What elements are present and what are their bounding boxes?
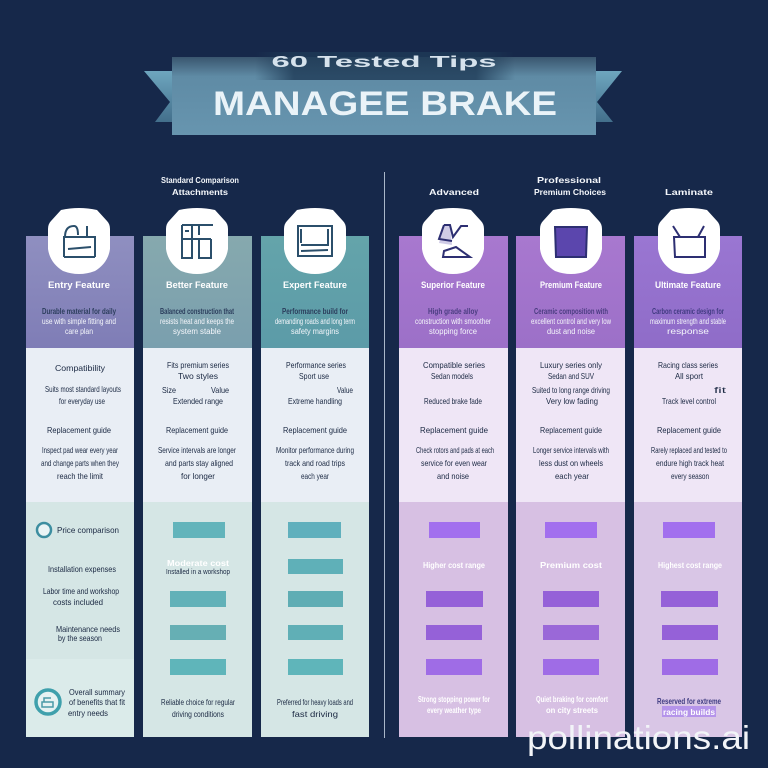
body text: Racing class series bbox=[658, 360, 718, 370]
body text: each year bbox=[301, 471, 329, 481]
body text: Track level control bbox=[662, 396, 716, 406]
header text: stopping force bbox=[429, 327, 478, 336]
body text: Replacement guide bbox=[540, 425, 602, 435]
body text: Replacement guide bbox=[420, 425, 488, 435]
body block bbox=[261, 348, 369, 503]
footer row text: by the season bbox=[58, 633, 102, 643]
body text bbox=[651, 360, 727, 481]
body text: Suited to long range driving bbox=[532, 385, 610, 395]
body text: Replacement guide bbox=[657, 425, 721, 435]
body text bbox=[41, 363, 121, 481]
column label: left group bbox=[161, 175, 239, 197]
body text: less dust on wheels bbox=[539, 458, 603, 468]
body text: Inspect pad wear every year bbox=[42, 445, 118, 455]
header text: Premium Feature bbox=[540, 280, 602, 290]
body text: and change parts when they bbox=[41, 458, 120, 468]
header text: Superior Feature bbox=[421, 280, 485, 290]
body text: endure high track heat bbox=[656, 458, 725, 468]
header block bbox=[516, 236, 625, 348]
body text: Check rotors and pads at each bbox=[416, 445, 494, 455]
header text: Expert Feature bbox=[283, 280, 347, 290]
icon: tool case bbox=[48, 208, 110, 274]
footer note: entry needs bbox=[68, 708, 108, 718]
subtitle: 60 Tested Tips bbox=[272, 54, 497, 71]
header text: excellent control and very low bbox=[531, 317, 611, 326]
divider bbox=[384, 172, 385, 738]
column label: fourth: Advanced bbox=[429, 187, 479, 197]
footer row text: Maintenance needs bbox=[56, 624, 120, 634]
footer row text: Price comparison bbox=[57, 525, 119, 535]
watermark: pollinations.ai bbox=[527, 719, 750, 756]
panel: column 3 bbox=[261, 208, 369, 737]
footer highlight text: Installed in a workshop bbox=[166, 569, 230, 576]
header text: safety margins bbox=[291, 327, 339, 336]
footer note bbox=[657, 697, 721, 717]
footer highlight text: Moderate cost bbox=[167, 558, 229, 568]
body text: Replacement guide bbox=[47, 425, 111, 435]
comparison bar bbox=[661, 591, 718, 607]
header text: Entry Feature bbox=[48, 280, 110, 290]
comparison bar bbox=[543, 659, 599, 675]
body text: Rarely replaced and tested to bbox=[651, 445, 727, 455]
icon: winged tool bbox=[422, 208, 484, 274]
header text: use with simple fitting and bbox=[42, 317, 116, 326]
header text: Balanced construction that bbox=[160, 307, 234, 316]
footer note bbox=[277, 697, 353, 719]
panel: column 1 bbox=[26, 208, 134, 737]
icon: square frame bbox=[284, 208, 346, 274]
comparison bar bbox=[170, 625, 226, 640]
body text: Monitor performance during bbox=[276, 445, 354, 455]
header block bbox=[261, 236, 369, 348]
footer note: Overall summary bbox=[69, 687, 126, 697]
panel: column 6 bbox=[634, 208, 742, 737]
comparison bar bbox=[429, 522, 480, 538]
column label: left group: Standard Comparison bbox=[161, 175, 239, 185]
header block bbox=[399, 236, 508, 348]
ribbon left tail bbox=[144, 71, 172, 122]
body text bbox=[158, 360, 236, 481]
comparison bar bbox=[545, 522, 597, 538]
body text bbox=[416, 360, 494, 481]
footer row text: Installation expenses bbox=[48, 564, 116, 574]
body text: Size bbox=[162, 385, 176, 395]
subtitle backing bbox=[255, 52, 515, 80]
comparison bar bbox=[662, 625, 718, 640]
header text: system stable bbox=[173, 327, 222, 336]
panel: column 5 bbox=[516, 208, 625, 737]
footer note: Reliable choice for regular bbox=[161, 697, 235, 707]
header text bbox=[650, 280, 726, 336]
body text: Luxury series only bbox=[540, 360, 603, 370]
column label: fifth: Professional bbox=[537, 175, 601, 185]
comparison bar bbox=[170, 659, 226, 675]
footer highlight text: Highest cost range bbox=[658, 560, 722, 570]
body text: Sedan and SUV bbox=[548, 371, 594, 381]
comparison bar bbox=[543, 625, 599, 640]
body block bbox=[26, 348, 134, 503]
footer block bbox=[143, 502, 252, 737]
body text: Replacement guide bbox=[166, 425, 228, 435]
footer note bbox=[161, 697, 235, 719]
header text: Performance build for bbox=[282, 307, 348, 316]
body block bbox=[399, 348, 508, 503]
column label: fifth bbox=[534, 175, 606, 197]
footer row text: costs included bbox=[53, 597, 103, 607]
footer note: every weather type bbox=[427, 705, 481, 715]
body text: Two styles bbox=[178, 371, 218, 381]
body text: Value bbox=[337, 385, 353, 395]
footer block bbox=[399, 502, 508, 737]
header text: Ceramic composition with bbox=[534, 307, 608, 316]
title ribbon bbox=[144, 52, 622, 135]
comparison bar bbox=[662, 659, 718, 675]
body text: fit bbox=[714, 385, 727, 395]
header text: resists heat and keeps the bbox=[160, 317, 234, 326]
body text: Compatible series bbox=[423, 360, 485, 370]
body text: and noise bbox=[437, 471, 469, 481]
header text: dust and noise bbox=[547, 327, 596, 336]
body text: Extreme handling bbox=[288, 396, 342, 406]
column label: sixth: Laminate bbox=[665, 187, 713, 197]
body text: service for even wear bbox=[421, 458, 487, 468]
header text: Carbon ceramic design for bbox=[652, 307, 724, 316]
comparison bar bbox=[170, 591, 226, 607]
header text bbox=[275, 280, 355, 336]
panel: column 4 bbox=[399, 208, 508, 737]
footer highlight text: Higher cost range bbox=[423, 560, 485, 570]
icon: carrier basket bbox=[658, 208, 720, 274]
footer block bbox=[26, 502, 134, 737]
comparison bar bbox=[288, 522, 341, 538]
body text: All sport bbox=[675, 371, 704, 381]
icon: filled block bbox=[540, 208, 602, 274]
footer block bbox=[516, 502, 625, 737]
comparison bar bbox=[288, 559, 343, 574]
body text: track and road trips bbox=[285, 458, 345, 468]
header block bbox=[143, 236, 252, 348]
icon: teal round badge bbox=[36, 690, 60, 714]
footer note: fast driving bbox=[292, 709, 338, 719]
comparison bar bbox=[426, 591, 483, 607]
body text: for everyday use bbox=[59, 396, 105, 406]
body text: Suits most standard layouts bbox=[45, 384, 121, 394]
body text: Compatibility bbox=[55, 363, 106, 373]
body block bbox=[516, 348, 625, 503]
comparison bar bbox=[663, 522, 715, 538]
comparison bar bbox=[173, 522, 225, 538]
header text: demanding roads and long term bbox=[275, 317, 355, 326]
footer block bbox=[634, 502, 742, 737]
header text: care plan bbox=[65, 327, 93, 336]
header text bbox=[415, 280, 491, 336]
comparison bar bbox=[288, 625, 343, 640]
comparison bar bbox=[426, 625, 482, 640]
body block bbox=[143, 348, 252, 503]
column label: fifth: Premium Choices bbox=[534, 187, 606, 197]
footer note: racing builds bbox=[663, 707, 715, 717]
footer note bbox=[536, 694, 608, 715]
body text: Service intervals are longer bbox=[158, 445, 236, 455]
body text: Reduced brake fade bbox=[424, 396, 482, 406]
footer row text: Labor time and workshop bbox=[43, 586, 119, 596]
header text: Better Feature bbox=[166, 280, 228, 290]
footer note bbox=[68, 687, 126, 718]
body text: Sedan models bbox=[431, 371, 473, 381]
footer highlight text bbox=[166, 558, 230, 576]
body text: reach the limit bbox=[57, 471, 104, 481]
column label: left group: Attachments bbox=[172, 187, 228, 197]
header text: response bbox=[667, 327, 710, 336]
footer note: Quiet braking for comfort bbox=[536, 694, 608, 704]
header text: maximum strength and stable bbox=[650, 317, 726, 326]
body text: and parts stay aligned bbox=[165, 458, 233, 468]
footer note: Strong stopping power for bbox=[418, 694, 490, 704]
ribbon right tail bbox=[596, 71, 622, 122]
comparison bar bbox=[543, 591, 599, 607]
ribbon body bbox=[172, 57, 596, 135]
body text: Longer service intervals with bbox=[533, 445, 609, 455]
body text: each year bbox=[555, 471, 589, 481]
body text: for longer bbox=[181, 471, 215, 481]
header text bbox=[531, 280, 611, 336]
body text bbox=[276, 360, 354, 481]
icon: badge one bbox=[37, 523, 51, 537]
footer highlight text: Premium cost bbox=[540, 560, 602, 570]
header text bbox=[42, 280, 116, 336]
body text: Fits premium series bbox=[167, 360, 229, 370]
footer note bbox=[418, 694, 490, 715]
body text: Performance series bbox=[286, 360, 346, 370]
comparison bar bbox=[426, 659, 482, 675]
icon: window frame bbox=[166, 208, 228, 274]
footer note: Reserved for extreme bbox=[657, 697, 721, 706]
footer block bbox=[261, 502, 369, 737]
comparison bar bbox=[288, 591, 343, 607]
body text: every season bbox=[671, 471, 709, 481]
body text: Value bbox=[211, 385, 229, 395]
header text bbox=[160, 280, 234, 336]
header text: High grade alloy bbox=[428, 307, 478, 316]
comparison bar bbox=[288, 659, 343, 675]
body text: Replacement guide bbox=[283, 425, 347, 435]
panel: column 2 bbox=[143, 208, 252, 737]
body text: Extended range bbox=[173, 396, 223, 406]
header text: Durable material for daily bbox=[42, 307, 116, 316]
body block bbox=[634, 348, 742, 503]
footer note: Preferred for heavy loads and bbox=[277, 697, 353, 707]
main title: MANAGEE BRAKE bbox=[213, 85, 557, 123]
footer note: of benefits that fit bbox=[69, 697, 126, 707]
header block bbox=[634, 236, 742, 348]
header text: construction with smoother bbox=[415, 317, 491, 326]
body text: Sport use bbox=[299, 371, 329, 381]
body text bbox=[532, 360, 610, 481]
header text: Ultimate Feature bbox=[655, 280, 721, 290]
footer note: driving conditions bbox=[172, 709, 224, 719]
footer note: on city streets bbox=[546, 705, 598, 715]
body text: Very low fading bbox=[546, 396, 598, 406]
header block bbox=[26, 236, 134, 348]
footer row text bbox=[43, 525, 120, 643]
